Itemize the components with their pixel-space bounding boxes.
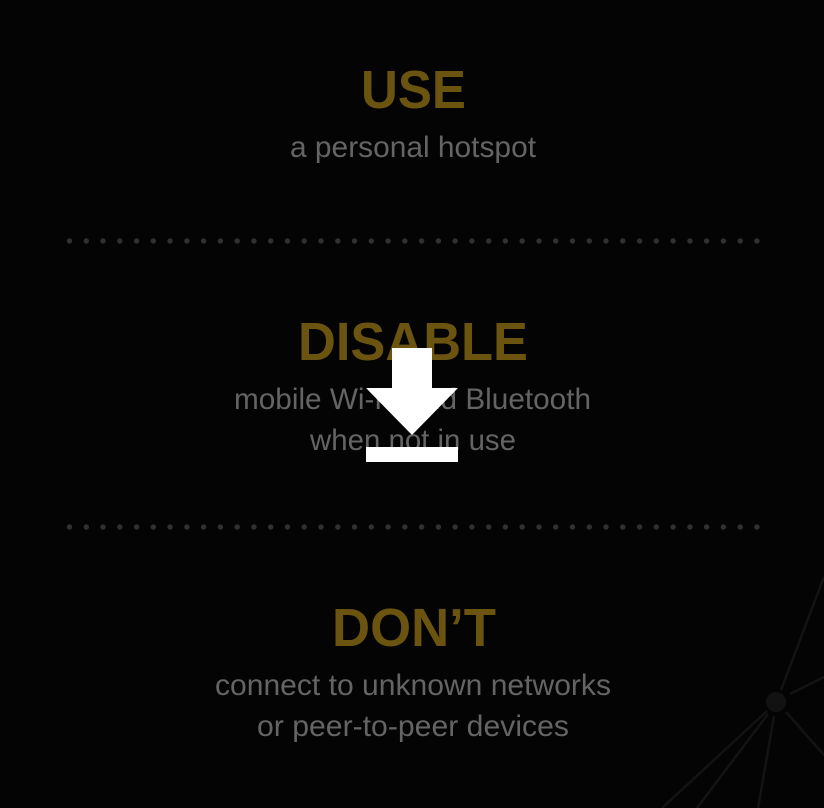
heading: use: USE: [361, 60, 466, 120]
section: disable: [234, 312, 591, 457]
text: or peer-to-peer devices: or peer-to-peer devices: [257, 710, 569, 743]
section: use: [290, 60, 537, 164]
icon: download arrow: [366, 348, 458, 462]
text: connect to unknown networks: connect to unknown networks: [215, 669, 611, 702]
heading: disable: DISABLE: [298, 312, 528, 372]
network node decoration: [662, 577, 824, 808]
section: don't: [215, 598, 611, 743]
heading: don't: DON’T: [332, 598, 496, 658]
text: mobile wi-fi and bluetooth: mobile Wi-Fi and Bluetooth: [234, 383, 591, 416]
text: when not in use: when not in use: [309, 424, 516, 457]
text: a personal hotspot: a personal hotspot: [290, 131, 537, 164]
